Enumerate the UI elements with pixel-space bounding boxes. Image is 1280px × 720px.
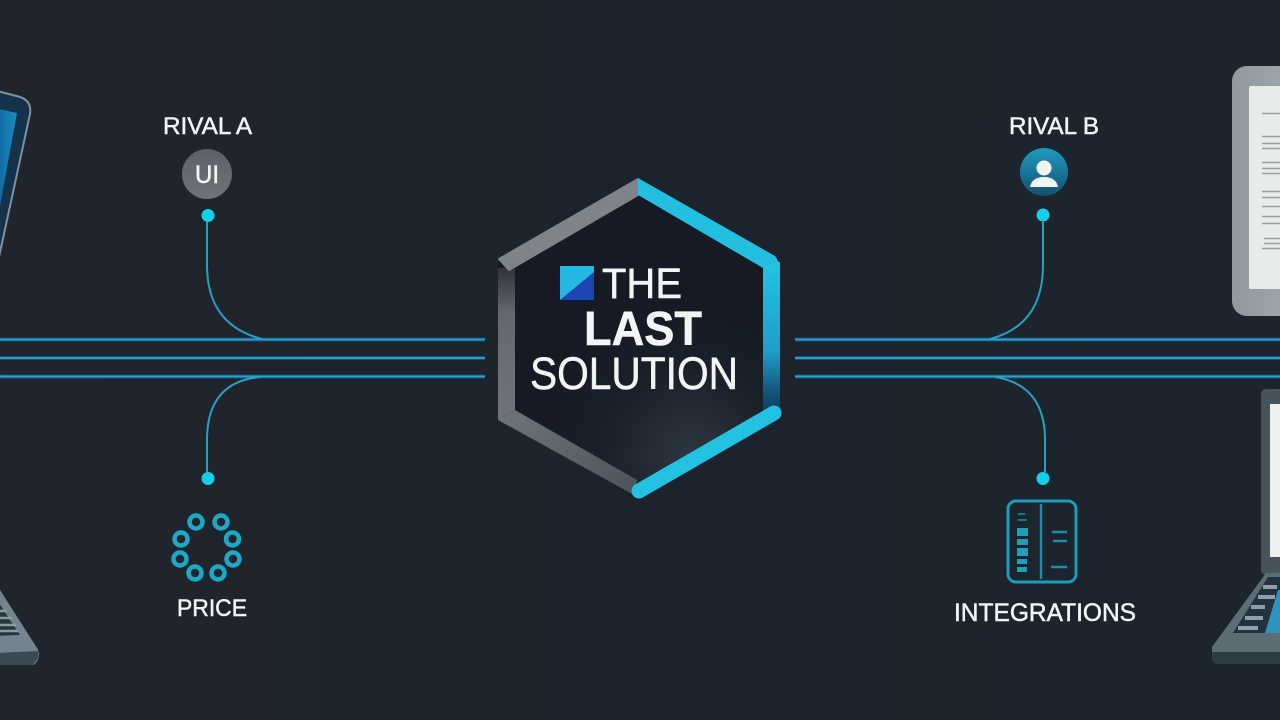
device: laptop bottom left bbox=[0, 582, 39, 665]
label: price: PRICE bbox=[177, 595, 247, 622]
connector lines left bbox=[0, 222, 485, 472]
central hexagon bbox=[498, 178, 780, 495]
device: document tablet right bbox=[1232, 66, 1280, 316]
connector dot bbox=[1036, 472, 1050, 485]
hexagon frame bbox=[498, 178, 780, 495]
title bbox=[530, 260, 738, 399]
title: SOLUTION bbox=[530, 348, 738, 399]
icon: user avatar bbox=[1020, 148, 1068, 196]
connector dot bbox=[1036, 208, 1050, 222]
label: integrations: INTEGRATIONS bbox=[954, 599, 1136, 627]
icon: integrations panel bbox=[1008, 501, 1076, 582]
label: rival A: RIVAL A bbox=[163, 113, 252, 140]
title: LAST bbox=[584, 303, 702, 356]
icon: UI badge: UI bbox=[195, 161, 219, 189]
connector lines right bbox=[795, 222, 1280, 472]
node: rival A bbox=[163, 113, 252, 222]
icon: ring of circles bbox=[174, 516, 240, 580]
connector dot bbox=[202, 209, 214, 222]
device: tablet left bbox=[0, 89, 30, 280]
node: integrations bbox=[954, 472, 1136, 627]
node: price bbox=[174, 472, 247, 622]
device: laptop bottom right bbox=[1212, 389, 1280, 664]
node: rival B bbox=[1009, 113, 1099, 222]
logo mark bbox=[560, 266, 594, 300]
label: rival B: RIVAL B bbox=[1009, 113, 1099, 140]
title: THE bbox=[602, 260, 682, 308]
connector dot bbox=[202, 472, 214, 485]
